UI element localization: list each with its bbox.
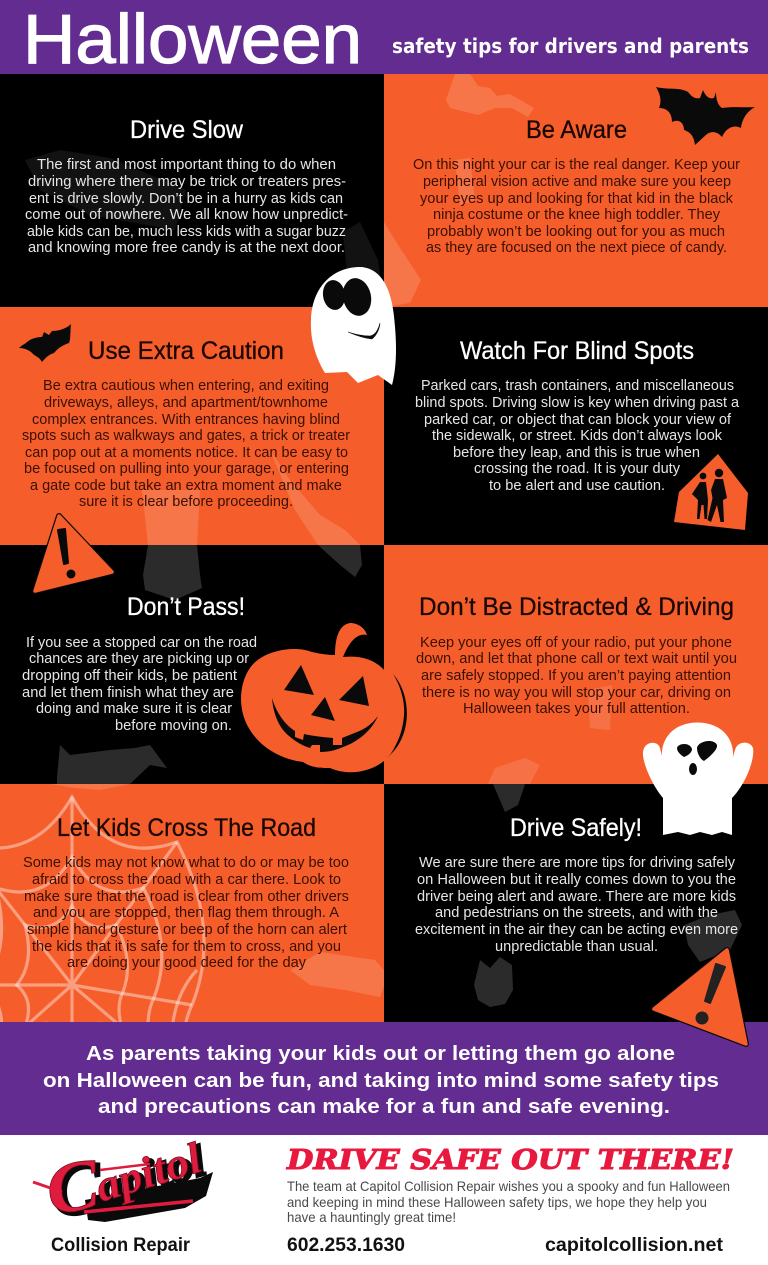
phone number: 602.253.1630 (287, 1235, 405, 1256)
logo: Capitol: C (40, 1143, 106, 1231)
body text: be focused on pulling into your garage, or entering (24, 460, 349, 477)
body text: down, and let that phone call or text wait until you (416, 650, 737, 667)
body text: ninja costume or the knee high toddler. They (433, 206, 720, 223)
body text: peripheral vision active and make sure you keep (423, 173, 731, 190)
body text: your eyes up and looking for that kid in the black (420, 190, 733, 207)
body text: are safely stopped. If you aren’t paying attention (421, 667, 731, 684)
body text: and pedestrians on the streets, and with the (435, 904, 718, 921)
body text: driving where there may be trick or treaters pres- (28, 173, 346, 190)
heading: Watch For Blind Spots (460, 337, 694, 365)
body text: spots such as walkways and gates, a trick or treater (22, 427, 350, 444)
body text: doing and make sure it is clear (36, 700, 232, 717)
body text: parked car, or object that can block your view of (424, 411, 732, 428)
icon: small bat (19, 324, 71, 362)
body text: We are sure there are more tips for driving safely (419, 854, 735, 871)
icon: bat (656, 87, 755, 145)
panel: use extra caution (0, 307, 384, 545)
body text: Keep your eyes off of your radio, put your phone (420, 634, 732, 651)
body text (413, 156, 740, 256)
body text: before they leap, and this is true when (453, 444, 700, 461)
closing text: As parents taking your kids out or letting them go alone (86, 1042, 675, 1065)
panel: drive safely (384, 784, 768, 1022)
body text: and you are stopped, then flag them through. A (33, 904, 339, 921)
logo: Capitol: apitol (90, 1133, 208, 1212)
body text: unpredictable than usual. (495, 938, 658, 955)
body text (23, 854, 349, 971)
body text: blind spots. Driving slow is key when driving past a (415, 394, 740, 411)
body text: before moving on. (115, 717, 232, 734)
heading: Don’t Pass! (127, 593, 245, 621)
body text: able kids can be, much less kids with a sugar buzz (27, 223, 346, 240)
web decoration (0, 794, 206, 1022)
heading: Drive Slow (130, 116, 244, 144)
panel: be aware (384, 74, 768, 307)
closing text (43, 1042, 719, 1118)
footer message: The team at Capitol Collision Repair wishes you a spooky and fun Halloween (287, 1178, 730, 1194)
body text: come out of nowhere. We all know how unpredict- (25, 206, 348, 223)
body text (416, 634, 737, 717)
body text (415, 854, 738, 955)
body text: Parked cars, trash containers, and miscellaneous (421, 377, 734, 394)
body text: are doing your good deed for the day (67, 954, 306, 971)
body text: Be extra cautious when entering, and exiting (43, 377, 329, 394)
body text: dropping off their kids, be patient (22, 667, 238, 684)
title: Halloween (23, 0, 362, 78)
body text: make sure that the road is clear from other drivers (24, 888, 349, 905)
body text: the sidewalk, or street. Kids don’t always look (432, 427, 722, 444)
body text: Halloween takes your full attention. (463, 700, 690, 717)
logo: Capitol: C (44, 1146, 110, 1234)
heading: Let Kids Cross The Road (57, 814, 316, 842)
icon: school crossing sign (674, 454, 748, 530)
body text: Some kids may not know what to do or may be too (23, 854, 349, 871)
body text: simple hand gesture or beep of the horn can alert (27, 921, 348, 938)
icon: warning triangle right (654, 950, 746, 1044)
body text: the kids that it is safe for them to cross, and you (32, 938, 341, 955)
body text (22, 634, 257, 734)
body text: driveways, alleys, and apartment/townhome (44, 394, 328, 411)
panel: drive slow (0, 74, 384, 307)
body text: complex entrances. With entrances having blind (32, 411, 340, 428)
closing message banner (0, 1022, 768, 1135)
icon: smiling ghost (311, 267, 396, 385)
header banner (0, 0, 768, 78)
body text (22, 377, 350, 510)
body text: to be alert and use caution. (489, 477, 665, 494)
body text: can pop out at a moments notice. It can be easy to (25, 444, 348, 461)
heading: Drive Safely! (510, 814, 642, 842)
logo: Capitol: apitol (94, 1136, 212, 1215)
body text: chances are they are picking up or (29, 650, 249, 667)
panel: let kids cross the road (0, 784, 384, 1022)
panel: don't be distracted and driving (384, 545, 768, 784)
body text: excitement in the air they can be acting even more (415, 921, 738, 938)
body text: there is no way you will stop your car, driving on (422, 684, 731, 701)
body text: The first and most important thing to do when (37, 156, 336, 173)
body text: afraid to cross the road with a car there. Look to (32, 871, 341, 888)
body text: probably won’t be looking out for you as much (427, 223, 725, 240)
icon: ghost with raised arms (643, 722, 753, 835)
logo: Capitol (33, 1133, 213, 1234)
footer message: have a hauntingly great time! (287, 1209, 456, 1225)
heading: Use Extra Caution (88, 337, 284, 365)
body text: on Halloween but it really comes down to you the (417, 871, 736, 888)
body text: and knowing more free candy is at the next door. (28, 239, 345, 256)
body text: On this night your car is the real danger. Keep your (413, 156, 740, 173)
body text: sure it is clear before proceeding. (79, 493, 293, 510)
body text (25, 156, 348, 256)
body text: crossing the road. It is your duty (474, 460, 680, 477)
panel: don't pass (0, 545, 384, 784)
body text (415, 377, 740, 494)
icon: jack-o-lantern (241, 623, 407, 773)
body text: ent is drive slowly. Don’t be in a hurry as kids can (29, 190, 343, 207)
slogan: DRIVE SAFE OUT THERE! (286, 1145, 734, 1176)
closing text: and precautions can make for a fun and safe evening. (98, 1095, 670, 1118)
footer (0, 1133, 768, 1265)
body text: If you see a stopped car on the road (26, 634, 257, 651)
icon: warning triangle left (35, 516, 112, 591)
body text: and let them finish what they are (22, 684, 234, 701)
footer message (287, 1178, 730, 1225)
body text: as they are focused on the next piece of candy. (426, 239, 727, 256)
footer message: and keeping in mind these Halloween safety tips, we hope they help you (287, 1194, 707, 1210)
closing text: on Halloween can be fun, and taking into mind some safety tips (43, 1069, 719, 1092)
panel: watch for blind spots (384, 307, 768, 545)
heading: Be Aware (526, 116, 627, 144)
heading: Don’t Be Distracted & Driving (419, 593, 734, 621)
body text: driver being alert and aware. There are more kids (417, 888, 736, 905)
body text: a gate code but take an extra moment and make (30, 477, 342, 494)
logo caption: Collision Repair (51, 1235, 191, 1256)
website: capitolcollision.net (545, 1235, 724, 1256)
